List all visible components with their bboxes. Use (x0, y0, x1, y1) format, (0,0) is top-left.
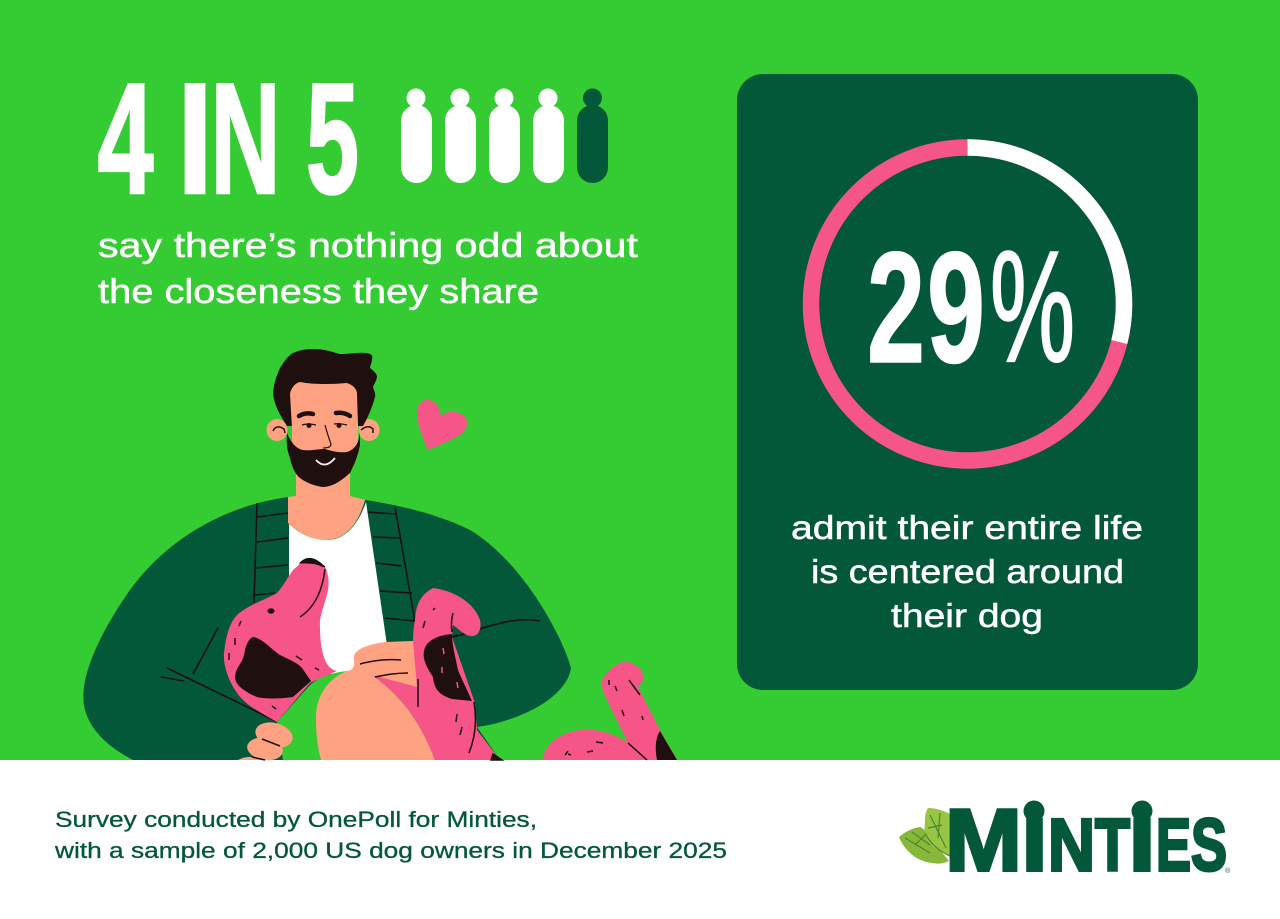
logo wordmark: T (1095, 804, 1130, 886)
white shirt (289, 502, 387, 674)
hand lower left (238, 718, 295, 763)
logo wordmark: I (1129, 804, 1155, 886)
percentage value: % (990, 219, 1075, 395)
footer survey note: Survey conducted by OnePoll for Minties, (55, 807, 537, 832)
logo wordmark: M (945, 790, 1022, 890)
percentage value (867, 219, 1075, 396)
dog nose (300, 558, 325, 567)
panel caption: their dog (891, 597, 1043, 634)
logo: Minties: ® (1225, 867, 1231, 875)
panel caption (791, 509, 1143, 634)
dog body markings (418, 608, 502, 760)
dog rear markings (565, 680, 647, 760)
dog body and raised paw (372, 588, 500, 760)
logo: Minties (899, 790, 1231, 890)
dog tail tip (656, 731, 677, 760)
logo wordmark (945, 790, 1227, 890)
eyes, brows and nose (299, 413, 350, 448)
heading: 4 in 5: 5 (306, 51, 359, 227)
jacket plaid lines (161, 503, 540, 721)
logo wordmark: I (1022, 804, 1047, 886)
panel caption: is centered around (811, 553, 1124, 590)
smile (316, 458, 335, 465)
footer survey note: with a sample of 2,000 US dog owners in December 2025 (54, 838, 727, 863)
dog tail leg (602, 662, 677, 760)
dog ear patch (235, 637, 311, 698)
heading: 4 in 5 (98, 51, 359, 227)
heading: 4 in 5: 4 (98, 51, 154, 227)
heading: 4 in 5: I (177, 51, 213, 227)
footer survey note (54, 807, 727, 863)
ears (266, 419, 380, 441)
illustration: man hugging dog (83, 349, 677, 763)
green gap under dog (277, 671, 347, 760)
panel caption: admit their entire life (791, 509, 1143, 546)
percentage value: 2 (867, 220, 925, 396)
hair (273, 349, 377, 426)
heading: 4 in 5: N (210, 51, 280, 227)
icon: heart (417, 400, 467, 450)
percentage value: 9 (927, 220, 985, 396)
dog eye (268, 608, 274, 614)
peach leg (316, 671, 435, 760)
logo wordmark: N (1048, 804, 1095, 886)
panel: 29 percent statistic (737, 74, 1198, 690)
dog head (224, 562, 337, 722)
icon: mint leaves (899, 808, 952, 864)
hand on dog (346, 641, 417, 687)
donut ring (811, 148, 1124, 460)
dog rump (542, 730, 647, 760)
logo wordmark: S (1191, 804, 1227, 886)
face (290, 382, 358, 470)
beard (287, 432, 360, 487)
subheading text: say there’s nothing odd about (98, 227, 639, 265)
jacket (83, 497, 571, 760)
dog head lines (229, 569, 325, 709)
subheading text (98, 227, 639, 311)
pictogram: five people, four highlighted (401, 88, 608, 183)
dog body patch (424, 634, 472, 701)
subheading text: the closeness they share (98, 273, 539, 311)
logo wordmark: E (1156, 804, 1191, 886)
neck and chest (288, 460, 365, 540)
